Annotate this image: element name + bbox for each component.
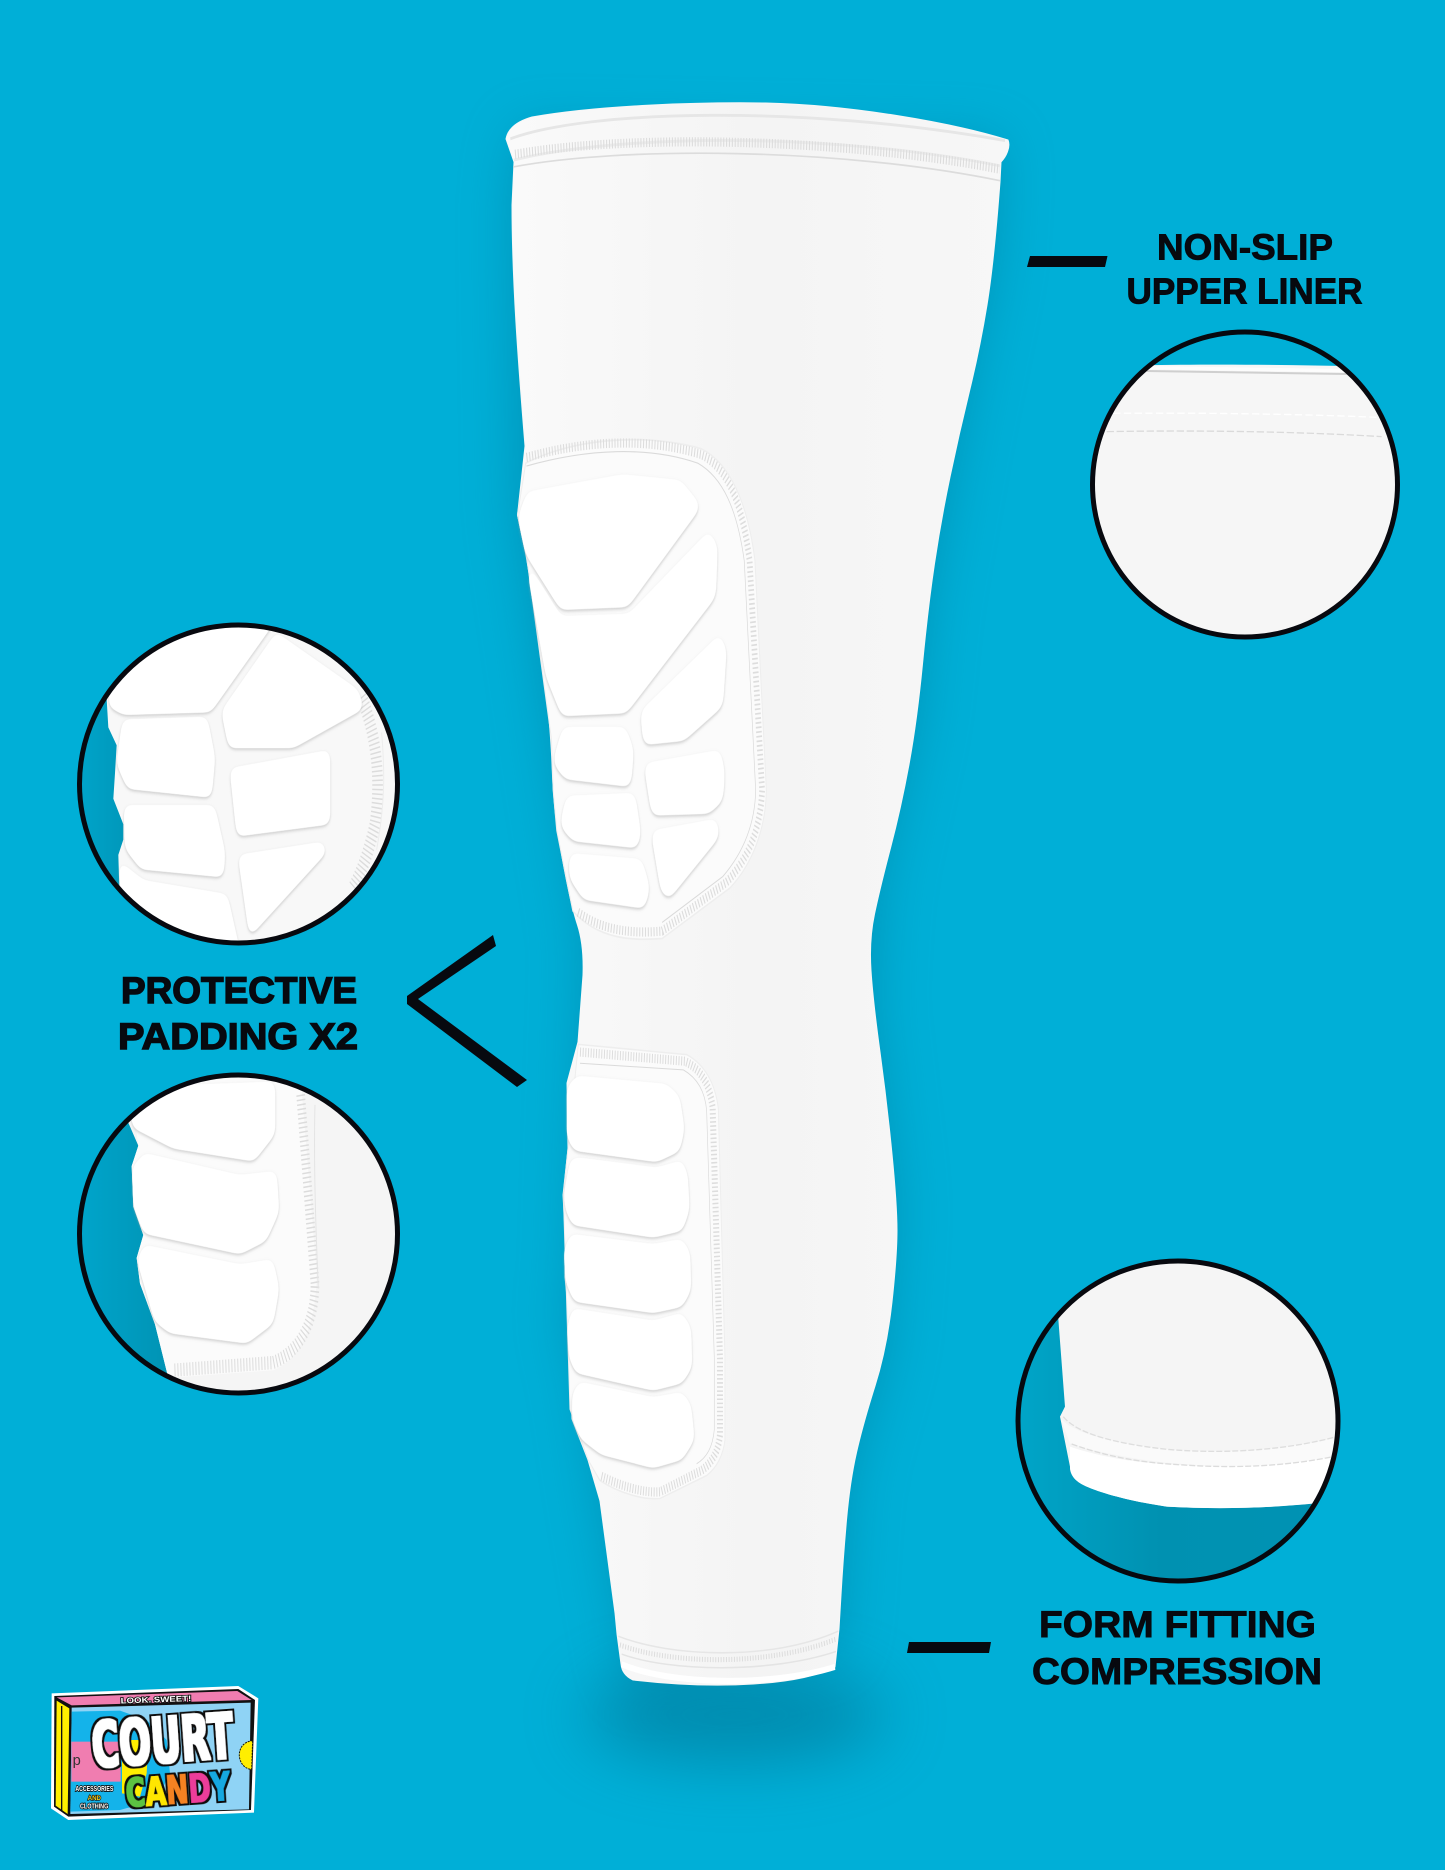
pink wrapper	[71, 1742, 121, 1782]
label: protective padding x2	[118, 970, 358, 1057]
foam panels	[110, 620, 362, 952]
label: form fitting compression	[1032, 1604, 1322, 1692]
foam panels	[520, 478, 725, 905]
pad base	[517, 440, 766, 939]
sleeve silhouette	[506, 103, 1009, 1685]
callout bar: non-slip liner	[1027, 256, 1108, 267]
yellow wrapper	[122, 1740, 148, 1797]
stitching	[173, 1095, 315, 1370]
stitched seam	[526, 443, 762, 932]
label: non-slip upper liner	[1126, 226, 1362, 312]
wordmark: CANDY	[124, 1765, 232, 1817]
detail circle: bottom hem	[1010, 1253, 1347, 1590]
blue wrapper	[70, 1711, 170, 1812]
pad base	[563, 1044, 725, 1499]
label: form fitting compression: COMPRESSION	[1032, 1651, 1322, 1692]
top rim and stitching	[510, 115, 1005, 181]
bottom hem	[618, 1631, 838, 1681]
exposed background	[82, 1122, 168, 1374]
shin pad	[563, 1044, 725, 1499]
detail circle: shin pad	[77, 1072, 400, 1396]
foam ribs	[566, 1079, 693, 1465]
stitching at the pad edge	[353, 697, 378, 888]
padded leg sleeve	[506, 103, 1009, 1685]
coin	[239, 1741, 253, 1769]
callout bar: form fitting	[907, 1642, 991, 1653]
label: protective padding x2: PADDING X2	[118, 1016, 358, 1057]
wordmark: CLOTHING	[80, 1802, 109, 1811]
wordmark: LOOK. SWEET!	[121, 1694, 191, 1706]
detail circle: knee pad	[77, 622, 400, 946]
stitched seam	[580, 1052, 720, 1492]
exposed background	[1020, 1320, 1091, 1551]
label: form fitting compression: FORM FITTING	[1039, 1604, 1316, 1645]
logo: Court Candy box	[51, 1686, 258, 1820]
label: non-slip upper liner: NON-SLIP	[1157, 226, 1333, 268]
box top	[57, 1691, 252, 1705]
sleeve end	[1053, 1253, 1347, 1508]
wordmark	[75, 1694, 236, 1817]
label: non-slip upper liner: UPPER LINER	[1126, 270, 1362, 312]
box side	[56, 1701, 69, 1814]
foam ribs	[130, 1084, 277, 1341]
p mark: p	[73, 1753, 81, 1769]
knee pad	[517, 440, 766, 939]
chevron pointer	[407, 935, 527, 1087]
wordmark: ACCESSORIES	[75, 1784, 113, 1793]
wordmark: AND	[88, 1795, 101, 1802]
box front	[70, 1703, 251, 1814]
label: protective padding x2: PROTECTIVE	[121, 970, 357, 1011]
white pad base	[132, 1145, 168, 1374]
detail circle: upper liner	[1090, 330, 1400, 640]
wordmark: COURT	[89, 1699, 236, 1783]
exposed background	[82, 700, 124, 886]
leg shadow	[512, 130, 1000, 1763]
box outline	[51, 1686, 258, 1820]
